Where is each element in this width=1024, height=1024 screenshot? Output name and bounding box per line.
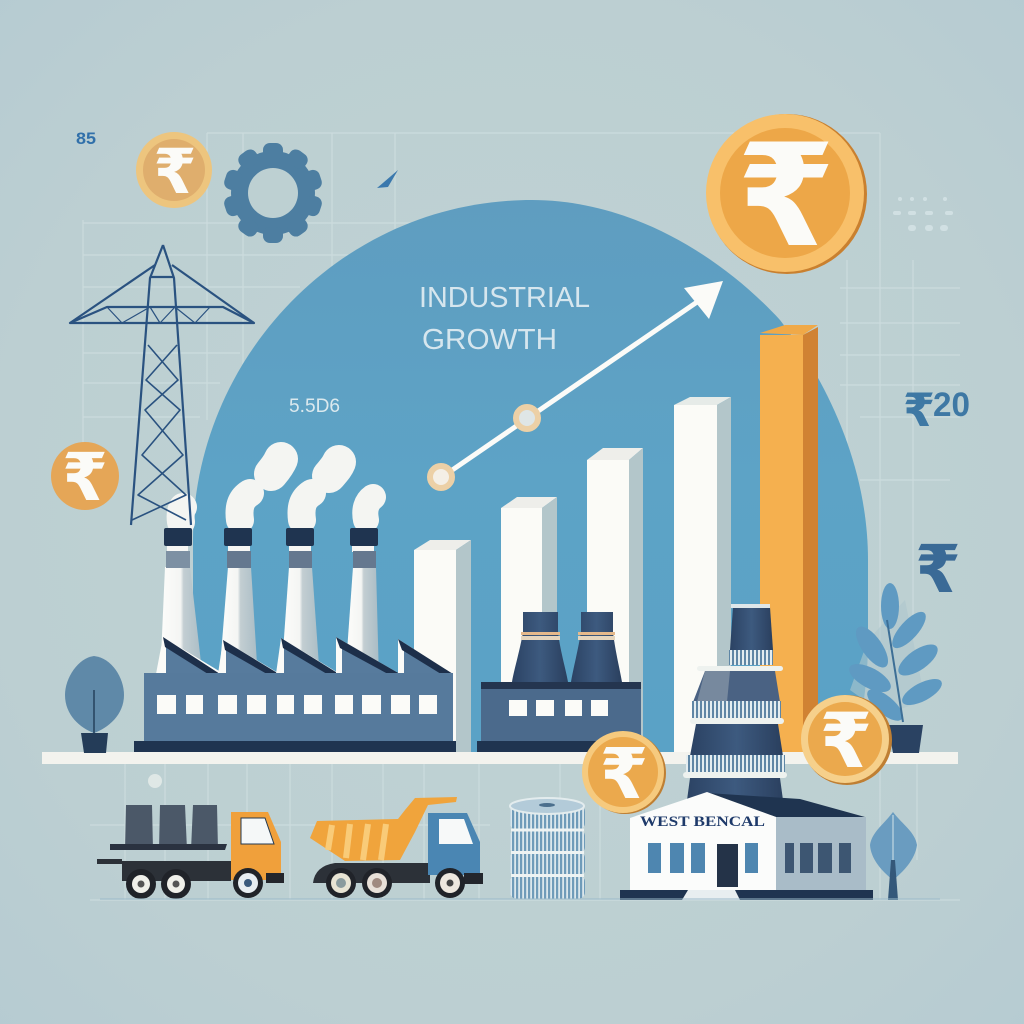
- pot: [888, 725, 923, 753]
- title: [419, 282, 590, 356]
- factory base: [134, 741, 456, 753]
- base: [620, 890, 873, 900]
- dump bed: [310, 797, 457, 861]
- background grid: [83, 133, 960, 900]
- factory right with cooling towers: [477, 612, 642, 753]
- coin: bottom middle: [582, 718, 666, 819]
- bar 4: [674, 397, 731, 753]
- stem: [887, 620, 903, 722]
- factory base: [477, 741, 642, 753]
- growth arrow: [430, 281, 723, 488]
- factory body: [144, 673, 453, 741]
- front windows: [648, 843, 758, 873]
- chassis: [97, 859, 231, 881]
- label: ₹20: ₹: [903, 374, 935, 440]
- cooling tower 2: [571, 612, 622, 682]
- small tree: [870, 812, 917, 900]
- cab window: [439, 819, 473, 844]
- side windows: [785, 843, 851, 873]
- wheels: [326, 868, 465, 898]
- plant right: [845, 583, 946, 753]
- leaves: [845, 583, 946, 726]
- coin: top left: [136, 121, 212, 211]
- steps: [682, 890, 740, 900]
- west bengal building: [620, 792, 873, 900]
- coin: bottom middle: ₹: [600, 718, 648, 819]
- transmission tower: [70, 245, 254, 525]
- cab window: [241, 818, 274, 844]
- plant left: [65, 656, 124, 753]
- bar 5 orange: [760, 325, 818, 753]
- factory windows: [157, 695, 437, 714]
- icon: gear: [222, 143, 324, 243]
- arrow head: [684, 281, 723, 319]
- cab: [231, 812, 281, 880]
- dump truck: [310, 797, 483, 898]
- label: ₹20: [903, 374, 970, 440]
- label: ₹20: 20: [933, 386, 970, 424]
- truck with barrels: [97, 805, 284, 899]
- factory tower center: [683, 604, 787, 815]
- label: 85: 85: [76, 129, 96, 148]
- coin: large rupee: [706, 80, 867, 286]
- blue semicircle backdrop: [193, 200, 868, 755]
- factory windows: [509, 700, 608, 716]
- bumper: [266, 873, 284, 883]
- coin: left: ₹: [62, 424, 108, 520]
- back leaf shade: [850, 600, 925, 715]
- barrels: [125, 805, 218, 850]
- ground shadow: [100, 898, 940, 900]
- faint dots: [893, 197, 953, 231]
- coin: bottom right: ₹: [820, 679, 872, 789]
- cooling tower 1: [512, 612, 568, 682]
- chassis: [313, 863, 430, 883]
- label: ₹: ₹: [915, 516, 961, 612]
- node 1: [430, 466, 452, 488]
- icon: small blue mark: [377, 170, 398, 188]
- shelf: [42, 752, 958, 764]
- wheels: [126, 868, 263, 899]
- label: 5.5D6: 5.5D6: [289, 396, 340, 417]
- factory left: [134, 637, 456, 753]
- side wing: [776, 817, 866, 891]
- arrow line: [445, 300, 700, 475]
- coin drum stack: [510, 798, 585, 899]
- factory roof band: [481, 682, 641, 689]
- chimneys: [160, 528, 379, 680]
- building sign: WEST BENCAL: [640, 814, 765, 830]
- small puff: [148, 774, 162, 788]
- coin: large rupee: ₹: [737, 80, 835, 286]
- sawtooth roof: [156, 637, 453, 674]
- front facade: [630, 792, 776, 891]
- bumper: [464, 873, 483, 884]
- coin: bottom right: [801, 679, 892, 789]
- chimney 3: [281, 528, 320, 680]
- factory body: [481, 686, 641, 742]
- bar chart: [414, 325, 818, 753]
- chimney 2: [219, 528, 258, 680]
- bar 2: [501, 497, 557, 753]
- title: INDUSTRIAL: [419, 282, 590, 314]
- coin: left: [51, 424, 119, 520]
- title: GROWTH: [422, 324, 557, 356]
- coin: top left: ₹: [153, 121, 197, 211]
- smoke plumes: [181, 459, 373, 522]
- node 2: [516, 407, 538, 429]
- chimney 4: [345, 528, 379, 680]
- chimney 1: [160, 528, 203, 680]
- bar 3: [587, 448, 643, 753]
- bar 1: [414, 540, 471, 753]
- cab: [428, 813, 480, 875]
- platform: [110, 844, 227, 850]
- door: [717, 844, 738, 887]
- dark roof: [707, 793, 865, 817]
- bed ribs: [328, 824, 386, 860]
